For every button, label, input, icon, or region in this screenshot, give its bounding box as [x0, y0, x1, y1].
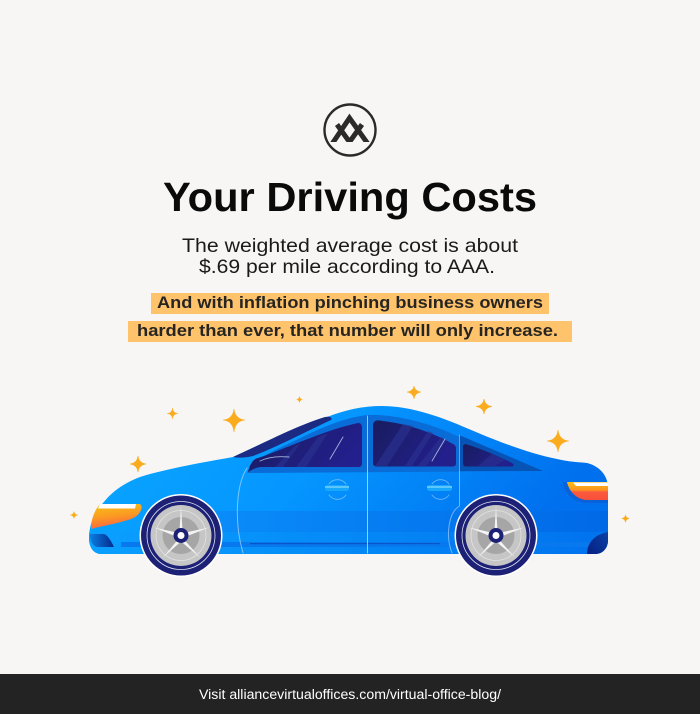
front side window: [248, 423, 362, 472]
car illustration: [89, 406, 615, 577]
middle window: [373, 420, 456, 466]
footer bar: Visit alliancevirtualoffices.com/virtual-office-blog/: [199, 687, 501, 702]
headlight: [91, 504, 142, 529]
rear bumper: [587, 532, 608, 554]
rear window surround: [459, 435, 543, 471]
highlighted callout: And with inflation pinching business owners: [157, 293, 543, 312]
footer bar: [0, 674, 700, 714]
door handles: [325, 485, 452, 491]
highlighted callout: harder than ever, that number will only increase.: [137, 321, 558, 340]
subtitle text: $.69 per mile according to AAA.: [199, 256, 495, 278]
rear window: [463, 444, 514, 466]
title: Your Driving Costs: [163, 174, 537, 220]
lower body bands: [89, 511, 615, 556]
sparkles: [70, 386, 630, 523]
front vent: [90, 534, 114, 547]
rear wheel: [454, 494, 538, 577]
glints and door lines: [237, 416, 460, 553]
roof band around windows: [247, 415, 543, 473]
logo: [324, 104, 376, 156]
windshield: [233, 417, 332, 458]
subtitle text: [182, 235, 519, 278]
taillight: [563, 482, 608, 503]
highlighted callout: [128, 293, 572, 342]
front wheel: [140, 494, 222, 577]
car body: [89, 406, 608, 554]
subtitle text: The weighted average cost is about: [182, 235, 519, 257]
window reflections: [275, 424, 505, 467]
